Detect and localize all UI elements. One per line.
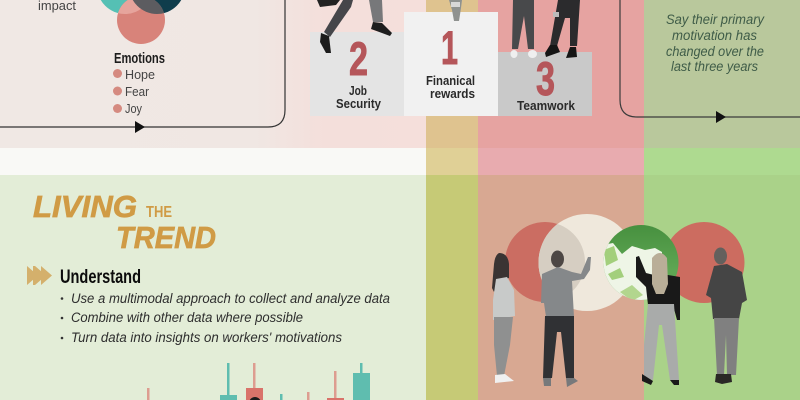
icon: two people standing on third place [510, 0, 580, 58]
figure: woman with raised arm [636, 253, 680, 385]
podium: third place, teamwork [498, 52, 592, 116]
figure: woman in profile [492, 253, 515, 383]
podium: third place, teamwork: Teamwork [517, 99, 575, 113]
figure: man pointing at circle [541, 250, 591, 387]
text: motivation statistic caption [666, 12, 765, 74]
overlapping circles illustration [505, 214, 744, 311]
text: motivation statistic caption: motivation has [672, 28, 757, 43]
podium: third place, teamwork: 3 [536, 52, 555, 105]
icon: jumping person legs [317, 0, 392, 53]
venn diagram [97, 0, 185, 44]
podium: second place, job security: Job [349, 84, 367, 98]
text: motivation statistic caption: last three years [671, 59, 758, 74]
podium: first place, financial rewards: rewards [430, 87, 475, 101]
title: living the trend: THE [146, 204, 172, 221]
title: living the trend [33, 189, 216, 255]
icon: person standing on first place [449, 0, 462, 21]
bullet list [61, 291, 390, 345]
title: living the trend: TREND [116, 220, 216, 255]
podium: second place, job security: Security [336, 97, 381, 111]
emotions legend [113, 50, 165, 116]
podium: second place, job security: 2 [349, 32, 368, 85]
emotions legend: Emotions [114, 50, 165, 67]
heading: understand: Understand [60, 267, 141, 288]
emotions legend: Joy [125, 101, 142, 116]
podium: second place, job security [310, 32, 404, 116]
title: living the trend: LIVING [33, 189, 137, 224]
bullet list: Combine with other data where possible [71, 310, 303, 325]
emotions legend: Hope [125, 67, 155, 82]
emotions legend: Fear [125, 84, 150, 99]
text: motivation statistic caption: Say their primary [666, 12, 765, 27]
figure: man in dark jacket [706, 248, 747, 384]
bullet list: Turn data into insights on workers' motivations [71, 330, 342, 345]
icon: triple chevrons [27, 266, 52, 285]
podium: first place, financial rewards: 1 [441, 21, 458, 74]
text: motivation statistic caption: changed over the [666, 44, 764, 59]
right framed panel line with arrow [620, 0, 800, 123]
podium: first place, financial rewards [404, 12, 498, 116]
podium: first place, financial rewards: Finanical [426, 74, 475, 88]
bullet list: Use a multimodal approach to collect and analyze data [71, 291, 390, 306]
left framed panel line with arrow [0, 0, 285, 133]
candlestick chart [147, 363, 370, 400]
